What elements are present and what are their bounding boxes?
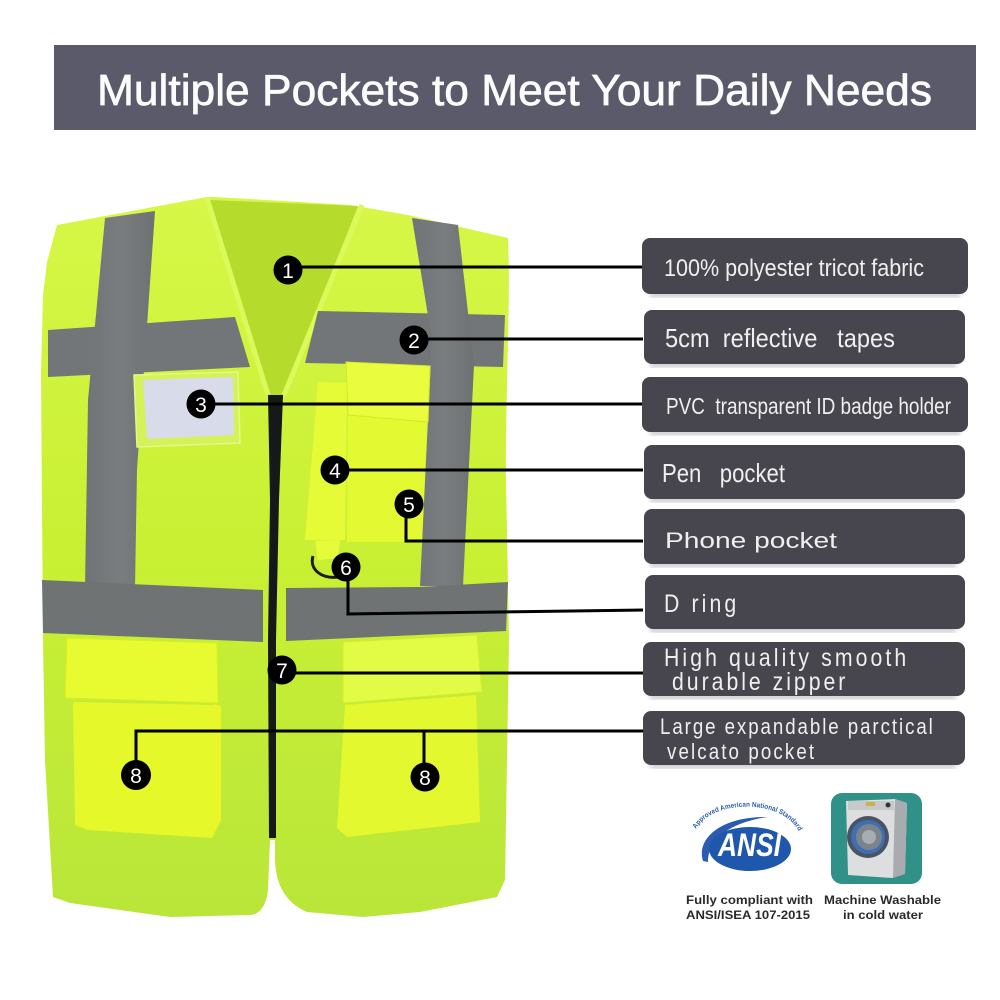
label: zipper: durable zipper xyxy=(672,667,846,695)
reflective tape: right vertical xyxy=(412,218,474,586)
marker 4: 4 xyxy=(329,460,341,483)
marker 7 xyxy=(268,656,296,684)
marker 1: 1 xyxy=(282,260,294,283)
number markers xyxy=(121,256,440,792)
ID badge holder xyxy=(134,372,240,447)
label: reflective tapes: 5cm reflective tapes xyxy=(665,323,895,353)
ANSI logo xyxy=(692,802,803,871)
label: velcro pocket xyxy=(643,711,965,768)
label: reflective tapes xyxy=(644,310,965,367)
caption: machine washable: in cold water xyxy=(843,910,924,922)
marker 2 xyxy=(400,326,428,354)
label: phone pocket xyxy=(644,509,965,567)
ANSI swoosh xyxy=(702,817,768,862)
marker 4 xyxy=(320,456,350,484)
header banner xyxy=(54,45,976,130)
caption: ANSI compliance: Fully compliant with xyxy=(686,895,813,907)
reflective tape: upper left horizontal xyxy=(48,317,250,377)
label: zipper: High quality smooth xyxy=(664,643,906,671)
control panel xyxy=(848,801,894,810)
label: phone pocket: Phone pocket xyxy=(665,528,837,553)
marker 1 xyxy=(274,256,302,284)
caption: machine washable: Machine Washable xyxy=(824,895,941,907)
ANSI wordmark: ANSI xyxy=(717,827,782,863)
marker 7: 7 xyxy=(276,660,288,683)
label: pen pocket: Pen pocket xyxy=(662,458,786,488)
leader lines xyxy=(136,267,643,777)
vest body xyxy=(41,197,509,917)
label: badge holder xyxy=(642,377,968,435)
marker 3: 3 xyxy=(195,394,207,417)
side panel xyxy=(893,799,907,878)
marker 5 xyxy=(394,490,424,518)
label: velcro pocket: velcato pocket xyxy=(667,741,814,764)
marker 5: 5 xyxy=(403,494,415,517)
lower right pocket xyxy=(337,635,482,837)
caption: ANSI compliance: ANSI/ISEA 107-2015 xyxy=(686,910,811,922)
vest illustration xyxy=(41,197,509,917)
machine body xyxy=(846,799,907,878)
marker 8 right: 8 xyxy=(419,767,431,790)
caption: machine washable xyxy=(824,895,941,922)
label: polyester fabric xyxy=(642,238,968,297)
reflective tape: left vertical xyxy=(85,211,155,588)
ANSI curved text: Approved American National Standard xyxy=(692,802,803,831)
label: velcro pocket: Large expandable parctical xyxy=(660,716,933,739)
marker 8 right xyxy=(410,762,440,792)
label: zipper xyxy=(643,642,965,699)
label: pen pocket xyxy=(644,445,965,502)
marker 8 left: 8 xyxy=(130,765,142,788)
marker 3 xyxy=(186,390,216,418)
D ring xyxy=(312,540,340,577)
reflective tape: upper right horizontal xyxy=(305,311,505,367)
marker 2: 2 xyxy=(408,330,420,353)
door xyxy=(847,816,889,858)
caption: ANSI compliance xyxy=(686,895,813,922)
washing machine icon xyxy=(831,793,922,884)
marker 6: 6 xyxy=(340,557,352,580)
header title: Multiple Pockets to Meet Your Daily Needs xyxy=(97,66,932,115)
label: polyester fabric: 100% polyester tricot fabric xyxy=(664,255,924,282)
zipper xyxy=(268,395,283,838)
collar trim xyxy=(207,198,362,395)
marker 8 left xyxy=(121,760,151,790)
phone pocket xyxy=(346,362,430,542)
ANSI oval xyxy=(709,827,791,871)
neck interior xyxy=(210,200,358,395)
pen pocket xyxy=(305,382,347,540)
teal tile xyxy=(831,793,922,884)
lower left pocket xyxy=(65,638,221,838)
reflective tape: lower left xyxy=(42,580,263,642)
marker 6 xyxy=(332,552,360,582)
label: D ring xyxy=(645,575,965,632)
label: D ring: D ring xyxy=(664,589,736,617)
reflective tape: lower right xyxy=(286,582,508,641)
